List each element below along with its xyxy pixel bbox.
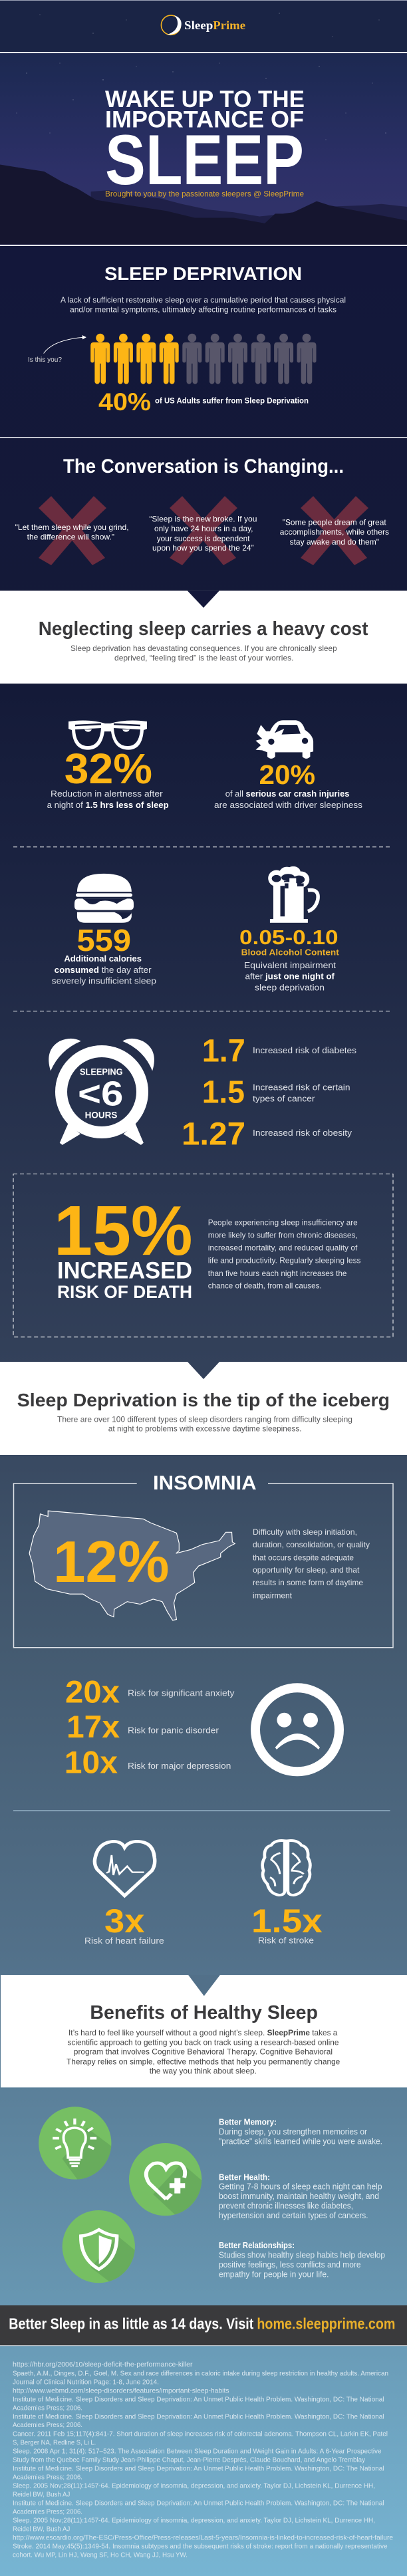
stat: 559 calories [52,874,156,986]
icon: crashed car [255,720,313,759]
panel: benefits of healthy sleep [1,1975,407,2087]
intro text [57,1415,352,1433]
benefit: better health: Getting 7-8 hours of sleep each night can help [219,2182,382,2192]
icon: alarm clock: SLEEPING [80,1067,123,1077]
heading: INSOMNIA [153,1472,257,1494]
caption [52,954,156,986]
panel: header with logo [0,0,407,53]
panel: sleep deprivation [28,263,346,416]
explanation text: more likely to suffer from chronic diseases, [208,1230,358,1239]
risk: diabetes: 1.7 [202,1033,245,1069]
icon: alarm clock: HOURS [85,1110,117,1120]
title: IMPORTANCE OF [105,106,304,133]
icon: heart with pulse [94,1841,155,1896]
pointer [188,1362,219,1379]
night sky stars [16,13,386,140]
definition text: impairment [253,1591,293,1600]
quote 2 with cross: “Sleep is the new broke. If you [149,515,257,524]
intro text: the way you think about sleep. [150,2067,257,2076]
references: Institute of Medicine. Sleep Disorders and Sleep Deprivation: An Unmet Public Health Problem. Washington, DC: The National [13,2396,384,2404]
risk: anxiety: 20x [65,1674,120,1710]
icon: light bulb [39,2107,112,2180]
risk: diabetes [202,1033,357,1069]
explanation text: life and productivity. Regularly sleeping less [208,1256,360,1265]
heading: Benefits of Healthy Sleep [90,2002,318,2023]
references: Sleep. 2005 Nov;28(11):1457-64. Epidemiology of insomnia, depression, and anxiety. Taylor DJ, Lichstein KL, Durrence HH, [13,2483,375,2490]
references [13,2361,393,2559]
heading: Neglecting sleep carries a heavy cost [39,618,368,640]
quote 1 with cross: the difference will show." [27,532,114,541]
references: Study from the Quebec Family Study Jean-Philippe Chaput, Jean-Pierre Després, Claude Bouchard, and Angelo Tremblay [13,2456,366,2464]
risk: cancer [202,1075,350,1110]
definition text: results in some form of daytime [253,1578,363,1587]
heading: SLEEP DEPRIVATION [104,263,302,284]
risk: diabetes: Increased risk of diabetes [253,1045,357,1055]
caption [244,960,336,993]
quote 1 with cross: "Let them sleep while you grind, [15,523,129,532]
icon: alarm clock [49,1039,154,1145]
references: Spaeth, A.M., Dinges, D.F., Goel, M. Sex and race differences in caloric intake during sleep restriction in healthy adults. American [13,2370,388,2377]
map of the United States [29,1511,235,1620]
intro text: program that involves Cognitive Behavioral Therapy. Cognitive Behavioral [74,2047,333,2057]
risk: obesity: Increased risk of obesity [253,1128,352,1138]
icon: shield [63,2210,135,2283]
references: Institute of Medicine. Sleep Disorders and Sleep Deprivation: An Unmet Public Health Problem. Washington, DC: The National [13,2465,384,2472]
distant mountains [91,190,407,245]
panel: insomnia [13,1472,393,1648]
handwritten note: Is this you? [28,356,62,364]
stat: blood alcohol content: Blood Alcohol Content [241,947,340,957]
definition text [253,1527,370,1600]
quote 3 with cross: stay awake and do them" [290,537,379,547]
title: SLEEP [105,120,304,199]
intro text: scientific approach to getting you back on track using a research-based online [68,2037,339,2047]
stat: 40 percent [98,388,309,416]
arrow [44,336,86,354]
caption [47,789,169,810]
risk: cancer: types of cancer [253,1093,315,1103]
icon: burger [74,874,134,923]
references: Stroke. 2014 May;45(5):1349-54. Insomnia subtypes and the subsequent risks of stroke: report from a nationally representative [13,2543,388,2551]
big stat: 15% [54,1192,193,1270]
references: Sleep. 2008 Apr 1; 31(4): 517–523. The Association Between Sleep Duration and Weight Gain in Adults: A 6-Year Prospective [13,2448,382,2455]
panel: sleeping under 6 hours [49,1033,357,1152]
pictogram: 4 of 10 people highlighted [90,334,316,384]
quote 2 with cross: upon how you spend the 24” [152,543,254,553]
benefit: better health [219,2172,382,2220]
explanation text: than five hours each night increases the [208,1269,347,1278]
benefit: better health: prevent chronic illnesses like diabetes, [219,2202,353,2211]
benefit: better memory: During sleep, you strengthen memories or [219,2127,367,2136]
caption: Reduction in alertness after [51,789,163,799]
quote 3 with cross [280,496,389,565]
intro text [67,2028,340,2076]
intro text: Therapy relies on simple, effective methods that help you permanently change [67,2057,340,2066]
references: S, Berger NA, Redline S, Li L. [13,2440,96,2447]
references: https://hbr.org/2006/10/sleep-deficit-the-performance-killer [13,2361,193,2369]
panel: tip of the iceberg [0,1362,407,1455]
icon: glasses with sleepy eyes [68,721,147,750]
logo wordmark [184,19,245,32]
benefit: better health: boost immunity, maintain healthy weight, and [219,2192,379,2201]
explanation text: increased mortality, and reduced quality of [208,1243,358,1253]
references: Academies Press; 2006. [13,2474,82,2482]
intro text [70,644,337,663]
intro text: It’s hard to feel like yourself without a good night’s sleep. SleepPrime takes a [68,2028,338,2037]
quote 2 with cross: your success is dependent [157,534,250,543]
quote 3 with cross: "Some people dream of great [283,518,386,527]
stat: 40 percent: 40% [98,388,151,416]
references: cohort. Wu MP, Lin HJ, Weng SF, Ho CH, Wang JJ, Hsu YW. [13,2552,188,2559]
references: Academies Press; 2006. [13,2422,82,2429]
stat: heart failure: 3x [104,1902,145,1940]
stat: 20 percent car crashes [214,720,363,810]
benefit: better memory: "practice" skills learned while you were awake. [219,2136,382,2146]
stat: 20 percent car crashes: 20% [259,759,315,790]
references: Academies Press; 2006. [13,2509,82,2516]
foreground mountains [0,165,407,245]
caption: a night of 1.5 hrs less of sleep [47,800,169,810]
big stat: RISK OF DEATH [57,1282,192,1302]
stat: stroke [251,1841,323,1946]
explanation text: chance of death, from all causes. [208,1281,322,1291]
quote 3 with cross: accomplishments, while others [280,527,389,537]
caption: sleep deprivation [255,983,325,993]
benefit: better memory: Better Memory: [219,2117,277,2126]
panel: hero night sky [0,13,407,245]
heading: Sleep Deprivation is the tip of the iceberg [17,1390,390,1410]
panel: the conversation is changing [15,455,389,565]
subtitle: Brought to you by the passionate sleepers @ SleepPrime [105,190,304,199]
references: Sleep. 2005 Nov;28(11):1457-64. Epidemiology of insomnia, depression, and anxiety. Taylor DJ, Lichstein KL, Durrence HH, [13,2517,375,2524]
logo wordmark: Sleep [184,19,213,32]
caption: of all serious car crash injuries [225,789,349,799]
icon: brain [263,1841,310,1895]
title: WAKE UP TO THE [105,86,305,112]
quote 1 with cross [15,496,129,565]
stat: 12 percent: 12% [53,1529,169,1595]
risk: panic disorder: 17x [67,1709,120,1744]
icon: moon logo [161,15,182,35]
references: Reidel BW, Bush AJ [13,2525,70,2533]
stat: 40 percent: of US Adults suffer from Sleep Deprivation [155,398,309,406]
icon: alarm clock: <6 [78,1075,123,1113]
risk: obesity [182,1117,352,1152]
panel: neglecting sleep [0,590,407,684]
definition text: A lack of sufficient restorative sleep over a cumulative period that causes physical [61,295,346,305]
logo wordmark: Prime [213,19,245,32]
risk: depression: Risk for major depression [128,1761,231,1771]
pointer [188,590,219,608]
explanation text [208,1218,360,1291]
stat: stroke: 1.5x [251,1902,323,1940]
quote 2 with cross [149,496,257,565]
definition text: opportunity for sleep, and that [253,1565,360,1575]
stat: stroke: Risk of stroke [258,1936,314,1946]
references: http://www.escardio.org/The-ESC/Press-Office/Press-releases/Last-5-years/Insomnia-is-linked-to-increased-risk-of-heart-failure [13,2534,393,2541]
icon: heart with plus [129,2143,202,2216]
panel: mental health risks [65,1674,339,1780]
call to action banner: Better Sleep in as little as 14 days. Visit [9,2315,254,2333]
definition text [61,295,346,315]
references: Institute of Medicine. Sleep Disorders and Sleep Deprivation: An Unmet Public Health Problem. Washington, DC: The National [13,2500,384,2507]
caption: after just one night of [245,971,335,981]
intro text: There are over 100 different types of sleep disorders ranging from difficulty sleeping [57,1415,352,1424]
stat: blood alcohol content [239,866,340,993]
benefit: better relationships: positive feelings, less conflicts and more [219,2260,361,2269]
caption: Additional calories [64,954,142,964]
intro text: Sleep deprivation has devastating consequences. If you are chronically sleep [70,644,337,653]
risk: depression [65,1745,231,1780]
references: Cancer. 2011 Feb 15;117(4):841-7. Short duration of sleep increases risk of colorectal adenoma. Thompson CL, Larkin EK, Patel [13,2430,388,2438]
heading: The Conversation is Changing... [63,455,344,477]
big stat: INCREASED [57,1258,192,1284]
benefit: better health: hypertension and certain types of cancers. [219,2211,368,2220]
stat: blood alcohol content: 0.05-0.10 [239,926,339,949]
references: http://www.webmd.com/sleep-disorders/features/important-sleep-habits [13,2388,229,2395]
risk: anxiety: Risk for significant anxiety [128,1688,235,1698]
benefit: better memory [219,2117,382,2146]
definition text: and/or mental symptoms, ultimately affecting routine performances of tasks [70,305,337,315]
intro text: at night to problems with excessive daytime sleepiness. [108,1424,302,1433]
panel: 15 percent risk of death [13,1174,393,1337]
panel: benefit icons [39,2107,207,2287]
stat: heart failure: Risk of heart failure [84,1936,164,1946]
references: Reidel BW, Bush AJ [13,2492,70,2499]
references: Institute of Medicine. Sleep Disorders and Sleep Deprivation: An Unmet Public Health Problem. Washington, DC: The National [13,2413,384,2420]
stat: 32 percent alertness: 32% [65,745,152,793]
risk: cancer: Increased risk of certain [253,1083,350,1093]
pointer [188,1975,220,1996]
stat: 32 percent alertness [47,721,169,810]
explanation text: People experiencing sleep insufficiency are [208,1218,358,1227]
definition text: that occurs despite adequate [253,1553,354,1562]
stat: heart failure [84,1841,164,1946]
icon: sad face [255,1688,339,1771]
references: Journal of Clinical Nutrition Page: 1-8, June 2014. [13,2379,159,2386]
call to action banner [0,2305,407,2346]
stat: 559 calories: 559 [77,923,131,958]
definition text: Difficulty with sleep initiation, [253,1527,357,1537]
title [105,86,305,199]
benefit: better relationships: empathy for people in your life. [219,2269,329,2279]
risk: panic disorder: Risk for panic disorder [128,1726,219,1736]
benefit: better relationships [219,2241,385,2279]
definition text: duration, consolidation, or quality [253,1540,370,1549]
risk: cancer: 1.5 [202,1075,245,1110]
intro text: deprived, “feeling tired” is the least of your worries. [114,654,294,663]
risk: depression: 10x [65,1745,118,1780]
benefit: better relationships: Better Relationships: [219,2241,295,2250]
risk: obesity: 1.27 [182,1117,245,1152]
caption: are associated with driver sleepiness [214,800,363,810]
risk: anxiety [65,1674,235,1710]
icon: beer mug [268,866,318,923]
quote 2 with cross: only have 24 hours in a day, [154,524,253,533]
caption [214,789,363,810]
caption: severely insufficient sleep [52,976,156,986]
benefit: better health: Better Health: [219,2172,270,2182]
caption: consumed the day after [55,965,152,975]
caption: Equivalent impairment [244,960,336,970]
benefit: better relationships: Studies show healthy sleep habits help develop [219,2251,385,2260]
risk: panic disorder [67,1709,219,1744]
references: Academies Press; 2006. [13,2405,82,2412]
